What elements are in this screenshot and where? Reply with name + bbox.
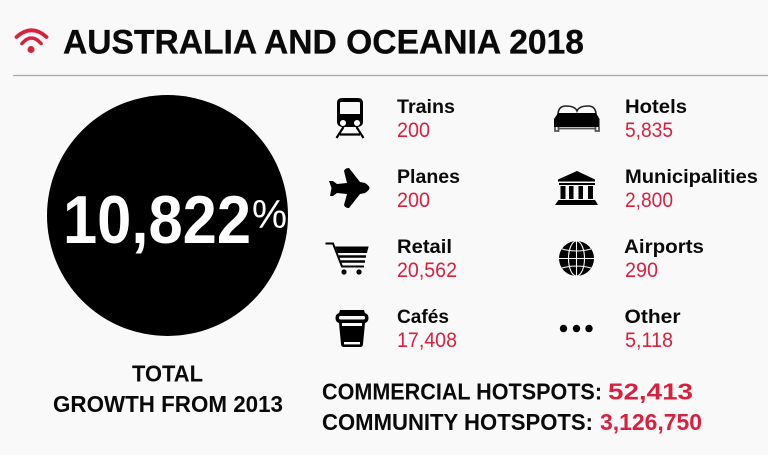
label: trains: 200 <box>397 119 430 142</box>
label: planes <box>397 166 460 212</box>
label: municipalities: 2,800 <box>625 189 673 212</box>
label: hotels: Hotels <box>625 96 687 118</box>
growth caption: GROWTH FROM 2013 <box>53 391 283 417</box>
growth circle <box>47 95 288 336</box>
label: other: 5,118 <box>625 329 673 352</box>
label: trains <box>397 96 455 142</box>
label: planes: Planes <box>397 166 460 188</box>
label: municipalities: Municipalities <box>625 166 758 188</box>
community hotspots: 3,126,750 <box>600 409 702 435</box>
commercial hotspots: 52,413 <box>608 378 693 404</box>
label: retail: 20,562 <box>397 259 457 282</box>
label: retail: Retail <box>397 236 452 258</box>
icon: wifi <box>16 30 46 53</box>
label: airports: Airports <box>624 236 704 258</box>
label: cafes: Cafés <box>397 306 449 328</box>
commercial hotspots: COMMERCIAL HOTSPOTS: <box>322 378 602 404</box>
growth caption: TOTAL <box>132 360 203 386</box>
icon: globe <box>559 241 594 276</box>
label: airports: 290 <box>625 259 658 282</box>
icon: train <box>336 98 364 138</box>
icon: municipal building <box>555 171 598 205</box>
label: cafes <box>397 306 457 352</box>
label: airports <box>624 236 704 282</box>
growth circle: % <box>252 193 287 237</box>
community hotspots: COMMUNITY HOTSPOTS: <box>322 409 593 435</box>
icon: plane <box>329 168 370 208</box>
label: planes: 200 <box>397 189 430 212</box>
icon: coffee cup <box>336 310 368 347</box>
label: hotels <box>625 96 687 142</box>
title: AUSTRALIA AND OCEANIA 2018 <box>63 24 584 62</box>
label: municipalities <box>625 166 758 212</box>
icon: shopping cart <box>326 244 368 275</box>
label: other: Other <box>624 306 681 328</box>
label: retail <box>397 236 457 282</box>
growth caption <box>53 360 283 417</box>
icon: bed <box>554 106 600 131</box>
label: cafes: 17,408 <box>397 329 457 352</box>
icon: three dots <box>560 325 593 332</box>
label: other <box>624 306 681 352</box>
growth circle: 10,822 <box>63 182 251 258</box>
label: trains: Trains <box>397 96 455 118</box>
label: hotels: 5,835 <box>625 119 673 142</box>
